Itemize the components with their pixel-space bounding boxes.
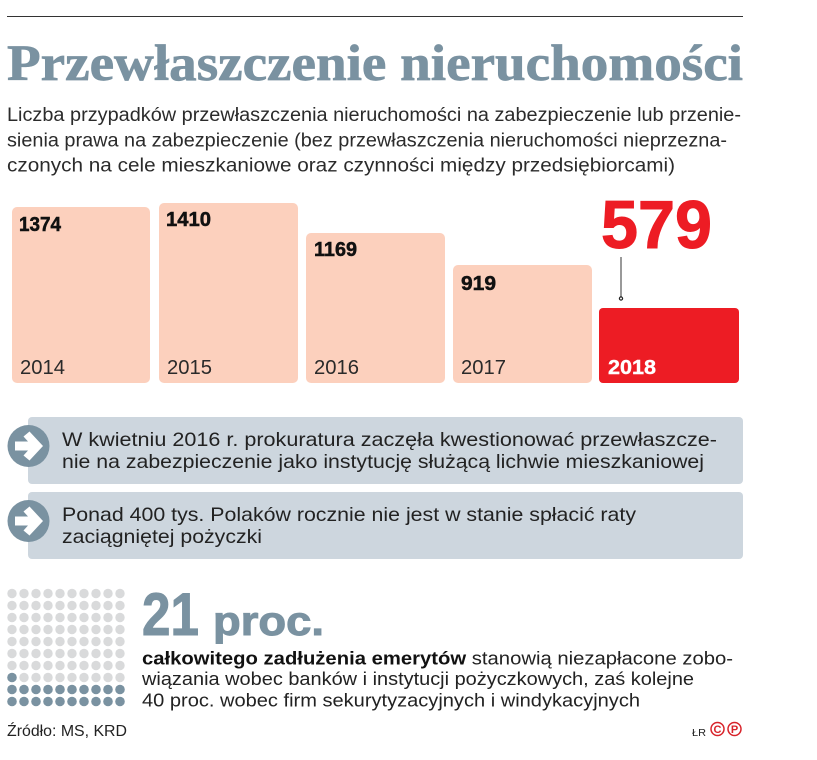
panel: note 400 tys: Ponad 400 tys. Polaków rocznie nie jest w stanie spłacić raty xyxy=(62,504,636,526)
intro text xyxy=(7,105,741,176)
bar: 2014: 1374 xyxy=(19,214,62,236)
bar: 2018 xyxy=(599,308,739,383)
panel: note 2016: nie na zabezpieczenie jako instytucję służącą lichwie mieszkaniowej xyxy=(62,451,704,473)
bar: 2017: 919 xyxy=(461,273,496,295)
intro text: sienia prawa na zabezpieczenie (bez przewłaszczenia nieruchomości nieprzezna- xyxy=(7,130,727,152)
icon: logo CP: P xyxy=(731,724,738,736)
bar: 2016: 2016 xyxy=(314,356,359,379)
bar: 2017: 2017 xyxy=(461,356,506,379)
icon: arrow xyxy=(8,425,50,467)
callout: 579 xyxy=(601,187,712,300)
bar: 2015: 1410 xyxy=(166,209,211,231)
panel: note 400 tys: zaciągniętej pożyczki xyxy=(62,526,262,548)
callout: 579: 579 xyxy=(601,187,712,263)
intro text: Liczba przypadków przewłaszczenia nieruchomości na zabezpieczenie lub przenie- xyxy=(7,105,741,126)
author initials: ŁR xyxy=(692,728,706,739)
intro text: czonych na cele mieszkaniowe oraz czynności między przedsiębiorcami) xyxy=(7,156,675,176)
bar: 2017 xyxy=(453,265,592,383)
bar: 2018: 2018 xyxy=(608,356,656,379)
panel: note 2016 xyxy=(8,417,743,484)
bar: 2015: 2015 xyxy=(167,356,212,379)
heading: 21 proc.: proc. xyxy=(213,598,324,644)
bar chart xyxy=(12,187,739,383)
text block: debt description: 40 proc. wobec firm sekurytyzacyjnych i windykacyjnych xyxy=(142,690,640,710)
bar: 2016: 1169 xyxy=(314,239,357,261)
bar: 2014 xyxy=(12,207,150,383)
title: Przewłaszczenie nieruchomości xyxy=(7,36,743,92)
bar: 2014: 2014 xyxy=(20,356,65,379)
text block: debt description: wiązania wobec banków i instytucji pożyczkowych, zaś kolejne xyxy=(141,669,694,689)
dot chart: 21 percent xyxy=(7,589,125,706)
panel: note 400 tys xyxy=(8,492,743,559)
heading: 21 proc.: 21 xyxy=(142,581,199,648)
icon: arrow xyxy=(8,500,50,542)
text block: debt description: całkowitego zadłużenia emerytów stanowią niezapłacone zobo- xyxy=(142,648,733,668)
icon: logo CP: C xyxy=(714,724,722,736)
heading: 21 proc. xyxy=(142,581,324,648)
panel: note 2016: W kwietniu 2016 r. prokuratura zaczęła kwestionować przewłaszcze- xyxy=(62,429,717,451)
source: Źródło: MS, KRD xyxy=(7,721,127,740)
text block: debt description xyxy=(141,648,733,710)
bar: 2015 xyxy=(159,203,298,383)
bar: 2016 xyxy=(306,233,445,383)
icon: logo CP xyxy=(711,722,741,736)
